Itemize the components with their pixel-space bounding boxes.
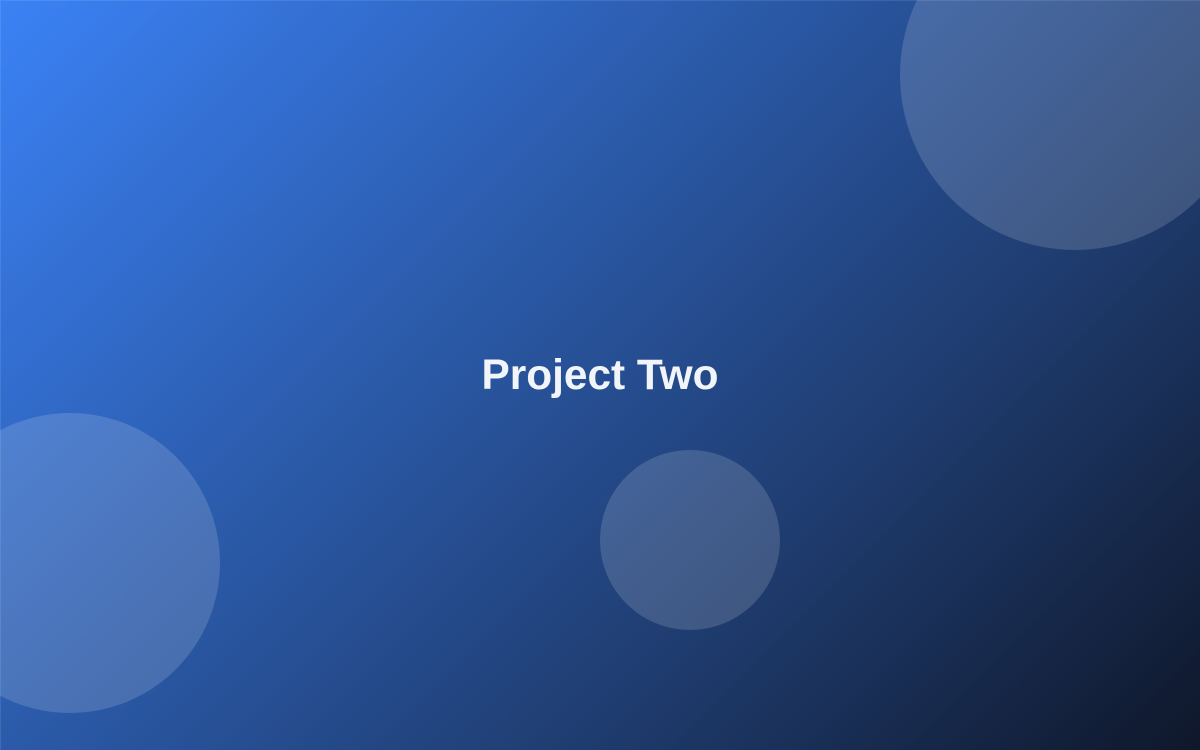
circle: bottom left [0,413,220,713]
circle: bottom centre [600,450,780,630]
title: Project Two [481,351,719,398]
circle: top right [900,0,1200,250]
